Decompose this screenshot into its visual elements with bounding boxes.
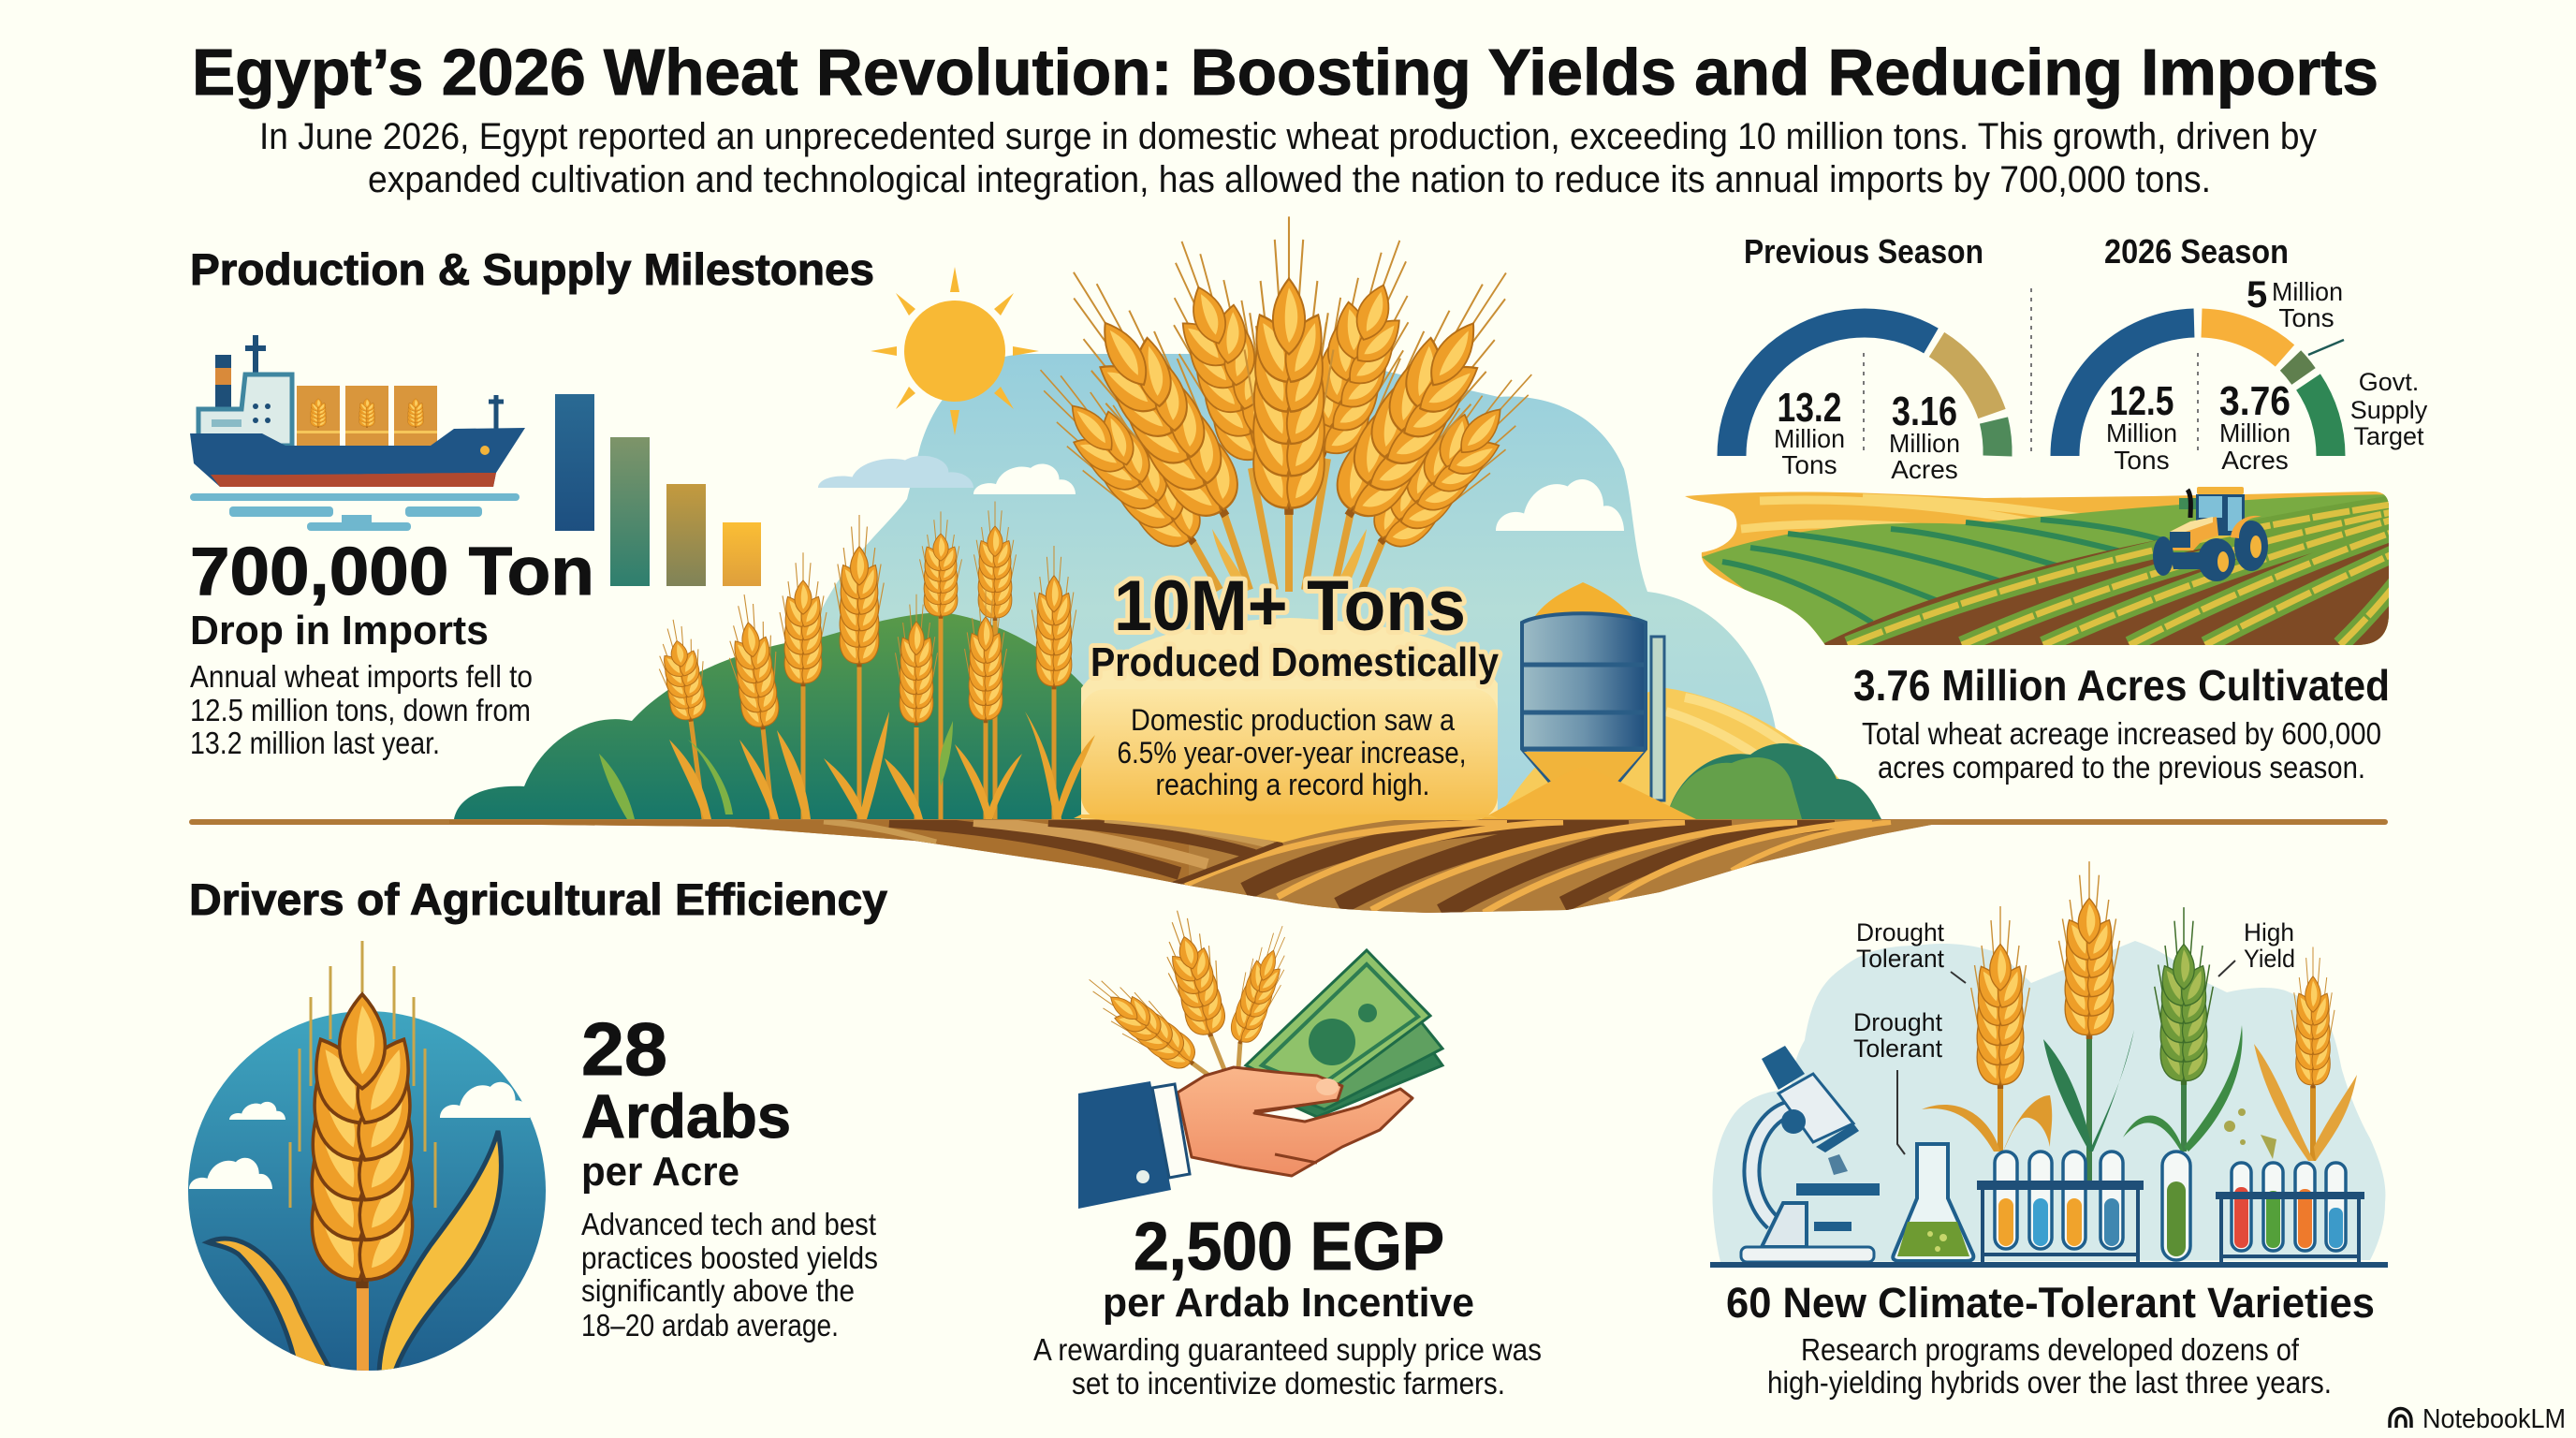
chart: falling import bars [555, 394, 761, 586]
stat: 28 ardabs per acre: Ardabs [581, 1081, 791, 1151]
intro text: expanded cultivation and technological integration, has allowed the nation to reduce its annual imports by 700,000 tons. [368, 159, 2211, 200]
callout: 5 million tons [2247, 274, 2344, 355]
gauge values: previous: 3.16 [1892, 389, 1957, 434]
gauge values: previous: Million [1889, 429, 1960, 458]
stat: 28 ardabs per acre: 28 [581, 1007, 667, 1091]
soil band [449, 820, 1932, 913]
brand: NotebookLM: NotebookLM [2422, 1404, 2566, 1434]
stat: 28 ardabs per acre: significantly above the [581, 1273, 855, 1308]
clouds [818, 456, 1624, 531]
sun [871, 267, 1039, 435]
stat: 3.76 million acres cultivated: Total wheat acreage increased by 600,000 [1862, 716, 2381, 751]
domestic production backdrop [1081, 618, 1498, 820]
icon: second test tube rack [2216, 1163, 2364, 1262]
gauge values: previous: 13.2 [1777, 385, 1842, 431]
gauge: 2026 season [2065, 323, 2331, 456]
stat: 28 ardabs per acre: 18–20 ardab average. [581, 1308, 839, 1343]
heading: drivers of agricultural efficiency: Drivers of Agricultural Efficiency [189, 874, 887, 924]
gauge values: 2026 [2106, 378, 2291, 475]
icon: tractor [2153, 487, 2268, 581]
stat: 10M+ tons produced domestically: 6.5% year-over-year increase, [1118, 736, 1466, 770]
callouts: variety labels [1853, 918, 2295, 1154]
orange valley between fields [1074, 814, 1498, 843]
gauge: previous season [1732, 323, 1998, 456]
stat: 10M+ tons produced domestically: Domestic production saw a [1131, 703, 1455, 737]
icon: microscope [1741, 1046, 1880, 1262]
callouts: variety labels: Yield [2244, 945, 2295, 973]
field wheat plants [599, 502, 1095, 819]
stat: 700,000 ton drop in imports: 12.5 million tons, down from [190, 693, 531, 727]
stat: 10M+ tons produced domestically [1090, 566, 1499, 801]
callouts: variety labels: Drought [1853, 1008, 1942, 1036]
right yellow hills [1498, 688, 1881, 819]
callout: govt supply target: Govt. [2359, 368, 2419, 396]
title: Egypt’s 2026 Wheat Revolution: Boosting Yields and Reducing Imports [192, 36, 2378, 109]
ground line [189, 819, 2388, 825]
stat: 2,500 EGP per ardab incentive: set to incentivize domestic farmers. [1072, 1366, 1505, 1401]
stat: 2,500 EGP per ardab incentive: A rewarding guaranteed supply price was [1033, 1332, 1542, 1367]
stat: 3.76 million acres cultivated [1853, 661, 2390, 785]
callout: 5 million tons: 5 [2247, 274, 2267, 315]
icon: flask [1893, 1144, 1973, 1261]
callout: govt supply target [2350, 368, 2428, 450]
stat: 3.76 million acres cultivated: acres compared to the previous season. [1878, 750, 2365, 785]
gauge values: previous: Million [1774, 424, 1845, 453]
callouts: variety labels: Drought [1856, 918, 1944, 946]
icon: hand holding money and wheat [1076, 903, 1442, 1209]
label: 2026 season: 2026 Season [2104, 232, 2289, 271]
stat: 60 new climate-tolerant varieties: high-yielding hybrids over the last three years. [1767, 1365, 2332, 1400]
callout: 5 million tons: Million [2272, 277, 2343, 306]
stat: 28 ardabs per acre: Advanced tech and best [581, 1207, 876, 1241]
gauge values: 2026: Tons [2114, 446, 2170, 475]
sky backdrop [818, 354, 1778, 819]
icon: grain silo [1481, 582, 1696, 819]
intro text: In June 2026, Egypt reported an unprecedented surge in domestic wheat production, exceeding 10 million tons. This growth, driven by [259, 116, 2317, 157]
gauge values: previous [1774, 385, 1960, 484]
stat: 60 new climate-tolerant varieties: 60 New Climate-Tolerant Varieties [1726, 1279, 2375, 1327]
callouts: variety labels: High [2244, 918, 2294, 946]
stat: 10M+ tons produced domestically: Produced Domestically [1090, 639, 1499, 685]
gauge values: previous: Tons [1781, 450, 1837, 479]
callout: govt supply target: Target [2353, 422, 2424, 450]
icon: large wheat bundle [1013, 216, 1559, 592]
callout: govt supply target: Supply [2350, 396, 2428, 424]
illustration: research lab with wheat varieties [1710, 861, 2388, 1268]
stat: 2,500 EGP per ardab incentive: 2,500 EGP [1134, 1210, 1444, 1284]
gauge values: 2026: Million [2219, 418, 2291, 448]
stat: 28 ardabs per acre [581, 1007, 878, 1343]
stat: 60 new climate-tolerant varieties: Research programs developed dozens of [1801, 1332, 2300, 1367]
lab backdrop [1712, 941, 2385, 1262]
gauge values: 2026: Million [2106, 418, 2177, 448]
gauge values: previous: Acres [1891, 455, 1958, 484]
icon: cargo ship [190, 335, 525, 531]
stat: 10M+ tons produced domestically: 10M+ Tons [1114, 566, 1466, 646]
intro text [259, 116, 2317, 200]
stat: 28 ardabs per acre: per Acre [581, 1149, 739, 1195]
gauge values: 2026: 12.5 [2110, 378, 2174, 424]
wheat plants [1922, 861, 2357, 1181]
label: previous season: Previous Season [1744, 232, 1983, 271]
callouts: variety labels: Tolerant [1853, 1034, 1942, 1063]
icon: single green test tube [2162, 1152, 2190, 1260]
stat: 28 ardabs per acre: practices boosted yields [581, 1240, 878, 1275]
gauge values: 2026: 3.76 [2219, 378, 2291, 424]
icon: wheat ear in blue circle [188, 941, 546, 1376]
illustration: central farm scene [189, 216, 2388, 927]
stat: 10M+ tons produced domestically: reaching a record high. [1155, 768, 1430, 801]
callouts: variety labels: Tolerant [1856, 945, 1944, 973]
stat: 700,000 ton drop in imports: 13.2 million last year. [190, 726, 440, 760]
stat: 700,000 ton drop in imports [190, 535, 594, 760]
green hill [454, 612, 1105, 819]
panel: season comparison gauges [1732, 232, 2428, 484]
stat: 3.76 million acres cultivated: 3.76 Million Acres Cultivated [1853, 661, 2390, 710]
gauge values: 2026: Acres [2221, 446, 2289, 475]
callout: 5 million tons: Tons [2278, 303, 2334, 332]
icon: first test tube rack [1977, 1152, 2144, 1262]
stat: 700,000 ton drop in imports: Annual wheat imports fell to [190, 659, 533, 694]
stat: 700,000 ton drop in imports: Drop in Imports [190, 608, 489, 653]
illustration: farm field with tractor [1676, 482, 2396, 651]
stat: 2,500 EGP per ardab incentive [1033, 1210, 1542, 1401]
stat: 2,500 EGP per ardab incentive: per Ardab Incentive [1103, 1280, 1474, 1326]
heading: production and supply milestones: Production & Supply Milestones [190, 244, 874, 294]
stat: 700,000 ton drop in imports: 700,000 Ton [190, 535, 594, 609]
lab bench line [1710, 1262, 2388, 1268]
stat: 60 new climate-tolerant varieties [1726, 1279, 2375, 1400]
